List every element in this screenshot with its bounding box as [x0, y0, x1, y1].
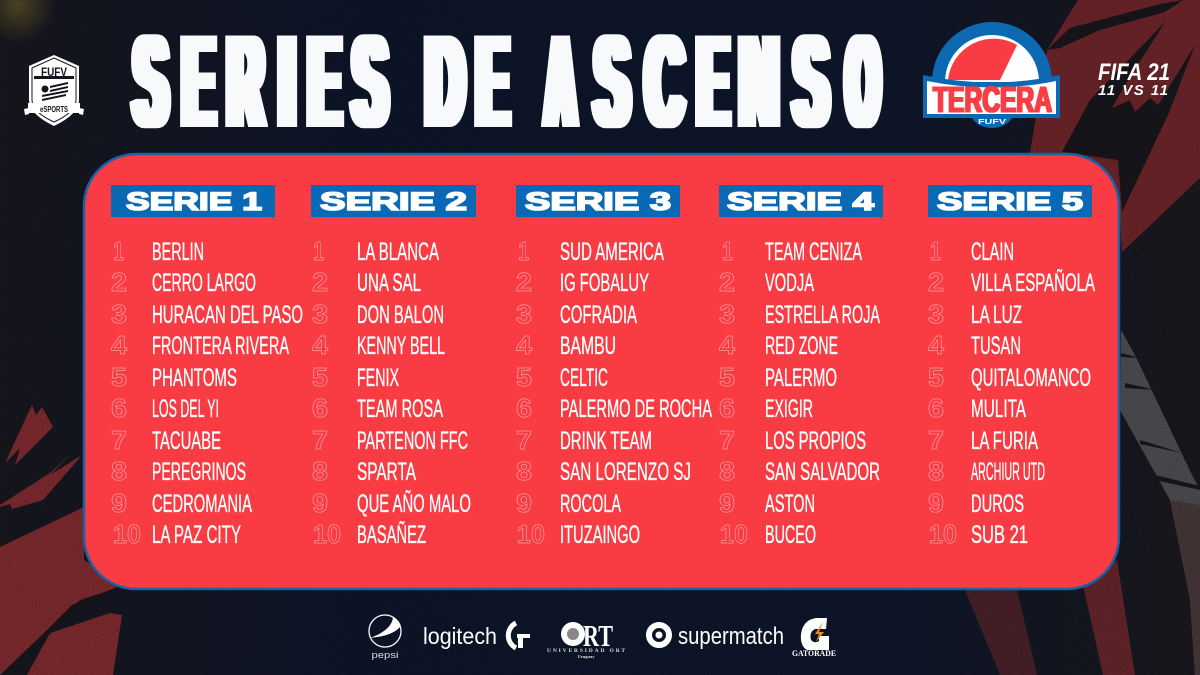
logo: Gatorade — [792, 618, 836, 658]
column: Serie 1: SERIE 1 — [126, 188, 262, 216]
column: Serie 4: LOS PROPIOS — [765, 427, 866, 455]
column: Serie 3: COFRADIA — [560, 301, 637, 329]
logo: Logitech G: logitech — [423, 623, 497, 649]
title — [134, 8, 879, 154]
column: Serie 1: CERRO LARGO — [152, 269, 256, 297]
column: Serie 3: SERIE 3 — [525, 188, 671, 216]
logo: Universidad ORT: RT — [583, 618, 613, 653]
title: I — [279, 8, 295, 154]
column: Serie 5: MULITA — [971, 395, 1026, 423]
column: Serie 5: 1 — [930, 236, 941, 266]
column: Serie 4: EXIGIR — [765, 395, 813, 423]
column: Serie 2: 9 — [312, 488, 328, 518]
title: E — [309, 8, 340, 154]
column: Serie 3: IG FOBALUY — [560, 269, 649, 297]
column: Serie 1: HURACAN DEL PASO — [152, 301, 303, 329]
column: Serie 3 — [516, 185, 712, 549]
column: Serie 1: PEREGRINOS — [152, 458, 246, 486]
title: D — [426, 8, 464, 154]
column: Serie 5: CLAIN — [971, 238, 1014, 266]
label: FIFA 21 11 vs 11: FIFA 21 — [1098, 59, 1170, 86]
column: Serie 4: BUCEO — [765, 521, 816, 549]
column: Serie 5: LA FURIA — [971, 427, 1038, 455]
column: Serie 3: BAMBU — [560, 332, 616, 360]
logo: Universidad ORT — [547, 618, 625, 659]
column: Serie 3: 4 — [516, 330, 533, 360]
logo: Supermatch — [649, 623, 784, 650]
title: E — [183, 8, 214, 154]
text: O — [847, 8, 879, 154]
column: Serie 4 — [719, 185, 883, 549]
column: Serie 5: 6 — [928, 393, 944, 423]
column: Serie 5: 8 — [928, 456, 944, 486]
column: Serie 3: CELTIC — [560, 364, 608, 392]
title: E — [698, 8, 728, 154]
logo: Universidad ORT: UNIVERSIDAD ORT — [547, 648, 625, 654]
column: Serie 1: 10 — [113, 519, 141, 549]
title: A — [546, 8, 575, 154]
column: Serie 1: 8 — [111, 456, 127, 486]
column: Serie 2: KENNY BELL — [357, 332, 445, 360]
column: Serie 1: 5 — [111, 362, 127, 392]
column: Serie 5 — [928, 185, 1095, 549]
column: Serie 5: SERIE 5 — [937, 188, 1083, 216]
column: Serie 3: SAN LORENZO SJ — [560, 458, 691, 486]
column: Serie 3: PALERMO DE ROCHA — [560, 395, 712, 423]
title: N — [740, 8, 778, 154]
title: R — [228, 8, 263, 154]
column: Serie 4: 3 — [719, 299, 735, 329]
title: S — [794, 8, 828, 154]
column: Serie 1: 4 — [111, 330, 128, 360]
column: Serie 3: 6 — [516, 393, 532, 423]
column: Serie 4: 5 — [719, 362, 735, 392]
column: Serie 1: PHANTOMS — [152, 364, 237, 392]
column: Serie 2: 7 — [312, 425, 328, 455]
column: Serie 5: 5 — [928, 362, 944, 392]
column: Serie 4: 6 — [719, 393, 735, 423]
column: Serie 1: TACUABE — [152, 427, 221, 455]
logo: Tercera FUFV: TERCERA — [933, 79, 1052, 120]
column: Serie 1: 3 — [111, 299, 127, 329]
column: Serie 4: 10 — [720, 519, 748, 549]
column: Serie 4: SERIE 4 — [727, 188, 874, 216]
column: Serie 4: 2 — [719, 267, 735, 297]
column: Serie 4: 9 — [719, 488, 735, 518]
column: Serie 5: ARCHIUR UTD — [971, 458, 1045, 486]
logo: FUFV eSports shield: eSPORTS — [40, 105, 68, 114]
column: Serie 4: 4 — [719, 330, 736, 360]
column: Serie 2: BASAÑEZ — [357, 520, 426, 549]
column: Serie 5: TUSAN — [971, 332, 1021, 360]
column: Serie 2: DON BALON — [357, 301, 444, 329]
column: Serie 2: 10 — [313, 519, 341, 549]
sponsors — [369, 615, 836, 661]
column: Serie 2: 8 — [312, 456, 328, 486]
column: Serie 1: CEDROMANIA — [152, 490, 252, 518]
panel: series — [84, 154, 1119, 589]
column: Serie 5: QUITALOMANCO — [971, 364, 1091, 392]
column: Serie 2: LA BLANCA — [357, 238, 439, 266]
column: Serie 1: 1 — [113, 236, 124, 266]
column: Serie 4: ASTON — [765, 490, 815, 518]
column: Serie 2: SPARTA — [357, 458, 416, 486]
column: Serie 5: LA LUZ — [971, 301, 1022, 329]
logo: Pepsi — [369, 615, 401, 661]
label: FIFA 21 11 vs 11 — [1098, 59, 1170, 99]
column: Serie 2 — [311, 185, 476, 549]
logo: Universidad ORT: Uruguay — [577, 654, 595, 659]
column: Serie 2: PARTENON FFC — [357, 427, 468, 455]
column: Serie 5: 9 — [928, 488, 944, 518]
column: Serie 1: 6 — [111, 393, 127, 423]
column: Serie 2: 6 — [312, 393, 328, 423]
column: Serie 4: 1 — [722, 236, 733, 266]
column: Serie 5: 7 — [928, 425, 944, 455]
column: Serie 1: LA PAZ CITY — [152, 521, 241, 549]
logo: Pepsi: pepsi — [372, 650, 398, 661]
column: Serie 5: VILLA ESPAÑOLA — [971, 268, 1095, 297]
column: Serie 5: 3 — [928, 299, 944, 329]
column: Serie 3: 1 — [518, 236, 529, 266]
logo: Tercera FUFV — [923, 22, 1060, 128]
column: Serie 3: 10 — [517, 519, 545, 549]
column: Serie 3: 8 — [516, 456, 532, 486]
column: Serie 5: SUB 21 — [971, 521, 1028, 549]
column: Serie 5: 4 — [928, 330, 945, 360]
column: Serie 3: ROCOLA — [560, 490, 621, 518]
column: Serie 2: QUE AÑO MALO — [357, 489, 471, 518]
title: S — [134, 8, 167, 154]
column: Serie 2: UNA SAL — [357, 269, 421, 297]
column: Serie 4: RED ZONE — [765, 332, 838, 360]
column: Serie 1 — [111, 185, 303, 549]
title: E — [477, 8, 508, 154]
logo: FUFV eSports shield: FUFV — [41, 65, 67, 79]
column: Serie 5: 2 — [928, 267, 944, 297]
column: Serie 2: 5 — [312, 362, 328, 392]
column: Serie 1: LOS DEL YI — [152, 395, 219, 423]
label: FIFA 21 11 vs 11: 11 VS 11 — [1098, 82, 1168, 99]
column: Serie 3: 7 — [516, 425, 532, 455]
column: Serie 4: TEAM CENIZA — [765, 238, 862, 266]
column: Serie 5: DUROS — [971, 490, 1024, 518]
column: Serie 4: VODJA — [765, 269, 814, 297]
column: Serie 5: 10 — [929, 519, 957, 549]
column: Serie 3: 2 — [516, 267, 532, 297]
column: Serie 2: 4 — [312, 330, 329, 360]
logo: Gatorade: GATORADE — [792, 649, 836, 658]
title: S — [353, 8, 387, 154]
column: Serie 2: 3 — [312, 299, 328, 329]
column: Serie 1: BERLIN — [152, 238, 204, 266]
column: Serie 3: 9 — [516, 488, 532, 518]
title: C — [646, 8, 683, 154]
column: Serie 4: 7 — [719, 425, 735, 455]
column: Serie 1: 9 — [111, 488, 127, 518]
column: Serie 1: 7 — [111, 425, 127, 455]
column: Serie 3: DRINK TEAM — [560, 427, 652, 455]
column: Serie 2: FENIX — [357, 364, 399, 392]
column: Serie 2: SERIE 2 — [320, 188, 467, 216]
column: Serie 3: ITUZAINGO — [560, 521, 640, 549]
column: Serie 4: SAN SALVADOR — [765, 458, 880, 486]
column: Serie 4: PALERMO — [765, 364, 837, 392]
logo: FUFV eSports shield — [24, 55, 84, 126]
column: Serie 2: 1 — [313, 236, 324, 266]
title: S — [595, 8, 629, 154]
column: Serie 2: 2 — [312, 267, 328, 297]
column: Serie 4: ESTRELLA ROJA — [765, 301, 880, 329]
column: Serie 2: TEAM ROSA — [357, 395, 443, 423]
column: Serie 4: 8 — [719, 456, 735, 486]
logo: Supermatch: supermatch — [678, 623, 784, 650]
column: Serie 3: 5 — [516, 362, 532, 392]
column: Serie 3: SUD AMERICA — [560, 238, 664, 266]
column: Serie 3: 3 — [516, 299, 532, 329]
column: Serie 1: FRONTERA RIVERA — [152, 332, 289, 360]
logo: Tercera FUFV: FUFV — [978, 119, 1006, 126]
column: Serie 1: 2 — [111, 267, 127, 297]
